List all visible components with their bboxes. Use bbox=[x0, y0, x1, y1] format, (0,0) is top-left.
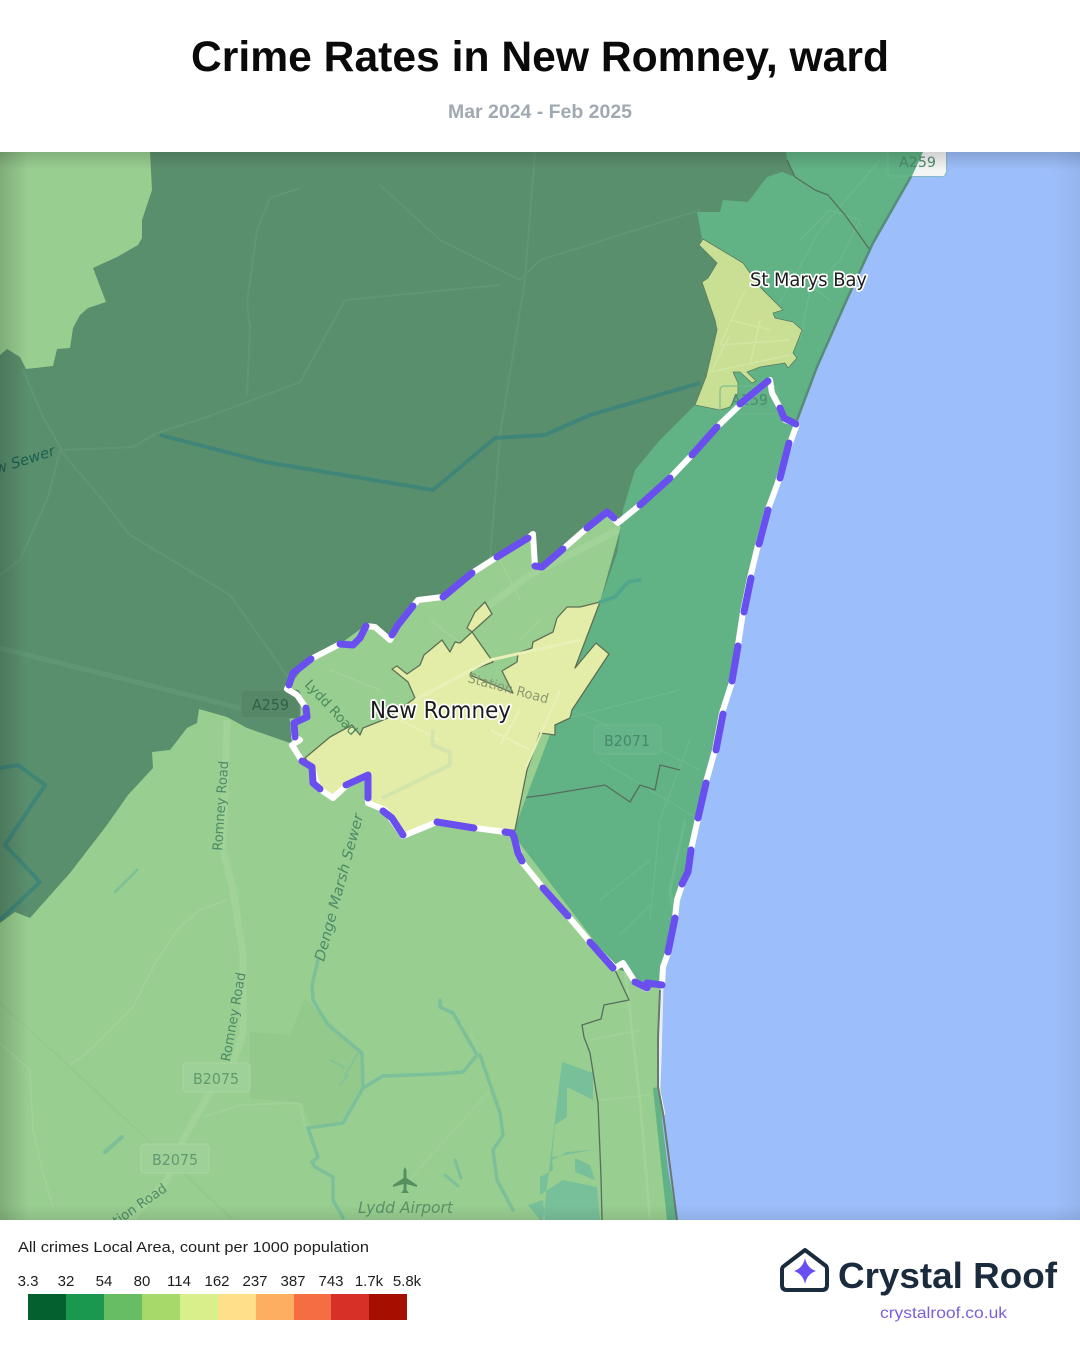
road shield: B2075 lower bbox=[141, 1144, 209, 1173]
water label: Denge Marsh Sewer: Denge Marsh Sewer bbox=[312, 811, 367, 963]
road shield: A259 St Marys: A259 bbox=[731, 391, 768, 409]
legend: value labels: 5.8k bbox=[393, 1273, 422, 1290]
region: high-level dark green background bbox=[0, 152, 802, 1094]
road label: Romney Road north: Romney Road bbox=[210, 760, 232, 851]
road label: Romney Road south: Romney Road bbox=[218, 971, 250, 1063]
subtitle: date range: Mar 2024 - Feb 2025 bbox=[448, 102, 632, 123]
road shield: B2071 bbox=[594, 725, 661, 754]
region: north New Romney light ward bbox=[287, 512, 621, 827]
road label: Station Road south-west: tion Road bbox=[110, 1181, 170, 1229]
place label: St Marys Bay: St Marys Bay bbox=[750, 269, 867, 291]
ward detail lines bbox=[571, 161, 880, 935]
legend: value labels: 162 bbox=[204, 1273, 230, 1290]
water channel through New Romney bbox=[382, 730, 450, 798]
roads on dark area bbox=[0, 152, 700, 708]
sea bbox=[660, 152, 1080, 1220]
legend: value labels: 114 bbox=[167, 1273, 191, 1290]
road shield: B2075 upper: B2075 bbox=[193, 1070, 239, 1088]
icon: airport plane bbox=[393, 1167, 417, 1193]
detail inside north ward bbox=[330, 530, 618, 690]
legend: value labels: 32 bbox=[58, 1273, 74, 1290]
road shield: A259 St Marys bbox=[720, 386, 778, 414]
road shield: A259 top: A259 bbox=[899, 155, 936, 171]
region: south light green area bbox=[0, 709, 677, 1220]
road label: Lydd Road: Lydd Road bbox=[301, 677, 361, 739]
beach edge bbox=[659, 985, 664, 1115]
icon: purple star bbox=[794, 1258, 816, 1284]
road shield: B2075 lower: B2075 bbox=[152, 1151, 198, 1169]
road shield: A259 west: A259 bbox=[252, 696, 289, 714]
region: coast strip mid green bbox=[653, 1087, 677, 1220]
legend: value labels: 237 bbox=[242, 1273, 268, 1290]
waterway: dark sewer channel bbox=[160, 383, 700, 490]
region: east mid green ward bbox=[512, 152, 928, 989]
legend: colour scale bbox=[28, 1294, 407, 1320]
farmland patch bbox=[299, 1102, 300, 1103]
coast line north bbox=[797, 173, 913, 420]
waterway: Denge Marsh Sewer and drains bbox=[105, 870, 513, 1218]
legend: value labels: 54 bbox=[96, 1273, 112, 1290]
ward boundary: white outline bbox=[287, 380, 797, 989]
logo url: crystalroof.co.uk bbox=[880, 1305, 1008, 1322]
road shield: A259 top bbox=[888, 152, 946, 176]
place label: New Romney: New Romney bbox=[370, 698, 511, 724]
region: coastal water patches bbox=[528, 1062, 600, 1220]
map edge vignette bbox=[0, 152, 1080, 1220]
water channel east of New Romney bbox=[600, 580, 640, 602]
region: north-west light green area bbox=[0, 152, 152, 369]
road shield: B2071: B2071 bbox=[604, 732, 650, 750]
legend: title: All crimes Local Area, count per 1000 population bbox=[18, 1239, 369, 1256]
road shield: A259 west bbox=[241, 690, 300, 718]
road label: Station Road: Station Road bbox=[466, 670, 550, 707]
legend: value labels: 743 bbox=[318, 1273, 344, 1290]
waterway: west boundary channels bbox=[0, 765, 45, 920]
ward boundary: purple dashes bbox=[289, 381, 796, 988]
legend: value labels: 387 bbox=[280, 1273, 306, 1290]
icon: house outline bbox=[782, 1250, 827, 1290]
legend: value labels: 1.7k bbox=[355, 1273, 384, 1290]
legend: value labels bbox=[18, 1273, 422, 1290]
legend: value labels: 3.3 bbox=[18, 1273, 38, 1290]
region: St Marys Bay yellow-green area bbox=[695, 239, 802, 410]
label: Lydd Airport: Lydd Airport bbox=[358, 1198, 454, 1217]
region: New Romney central yellow area bbox=[305, 602, 609, 836]
title: Crime Rates in New Romney, ward bbox=[191, 33, 889, 81]
street pattern in St Marys Bay bbox=[710, 290, 790, 372]
legend: value labels: 80 bbox=[134, 1273, 150, 1290]
road shield: B2075 upper bbox=[183, 1063, 250, 1092]
detail inside yellow area bbox=[400, 640, 580, 770]
logo: Crystal Roof bbox=[782, 1250, 1058, 1296]
ward outlines bbox=[522, 160, 870, 1220]
south map roads and detail bbox=[0, 720, 650, 1220]
logo wordmark: Crystal Roof bbox=[838, 1255, 1058, 1296]
coast line bbox=[658, 990, 677, 1220]
